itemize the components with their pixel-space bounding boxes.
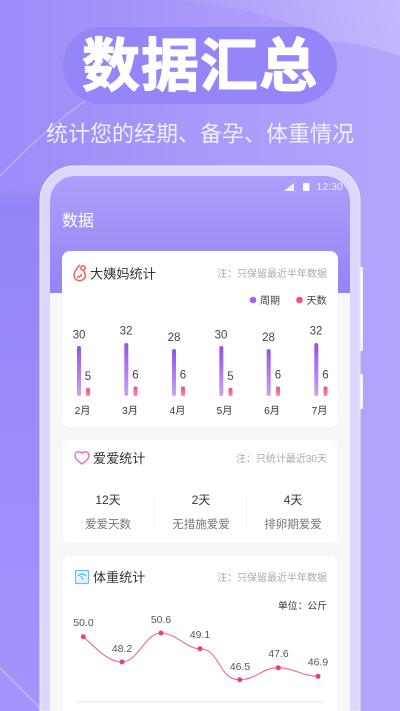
stat: ovulation: 排卵期爱爱 [264, 517, 322, 531]
bar chart: 6月 [264, 405, 280, 417]
subtitle: 统计您的经期、备孕、体重情况 [46, 122, 354, 146]
bar chart: 5 [227, 371, 234, 383]
stat: ovulation [264, 493, 322, 531]
bar chart: 5 [85, 371, 91, 383]
legend [250, 294, 326, 307]
bar chart: 28 [262, 332, 275, 344]
phone screen background [50, 176, 350, 711]
title: 数据汇总 [82, 34, 318, 99]
line chart: 46.5 [230, 662, 250, 673]
stat: days: 爱爱天数 [85, 517, 131, 531]
panel: intimacy stats [62, 440, 338, 543]
status bar [284, 181, 343, 193]
stat: unprotected: 2天 [192, 493, 210, 507]
screen heading: 数据 [62, 212, 94, 230]
line chart: 49.1 [190, 630, 210, 641]
stat: days: 12天 [95, 493, 121, 507]
title pill [63, 27, 337, 104]
bar chart: 5月 [217, 405, 232, 417]
phone frame [40, 166, 360, 711]
phone side buttons [359, 267, 363, 409]
status bar: 12:30 [316, 181, 343, 193]
line chart: 48.2 [112, 644, 132, 655]
line chart: 50.0 [73, 618, 94, 629]
line chart [73, 615, 328, 702]
note: 注：只统计最近30天 [236, 452, 327, 465]
icon: drop [74, 265, 86, 281]
bar chart: 2月 [75, 405, 90, 417]
stat: unprotected: 无措施爱爱 [172, 517, 230, 531]
bar chart: 6 [180, 370, 186, 382]
bar chart: 32 [120, 326, 132, 338]
line chart: 47.6 [268, 649, 289, 660]
stat: unprotected [172, 493, 230, 531]
unit label: 单位：公斤 [278, 599, 327, 612]
bar chart: 30 [73, 330, 85, 342]
stat: days [85, 493, 131, 531]
note: 注：只保留最近半年数据 [217, 571, 327, 584]
panel heading: 爱爱统计 [93, 451, 145, 466]
bar chart: 4月 [170, 405, 185, 417]
bar chart: 6 [275, 370, 281, 382]
bar chart: 7月 [312, 405, 327, 417]
bar chart [73, 326, 329, 417]
stat: ovulation: 4天 [284, 493, 302, 507]
bar chart: 6 [322, 370, 329, 382]
bar chart: 28 [168, 332, 180, 344]
panel: period stats [62, 251, 338, 427]
panel: weight stats [62, 556, 338, 711]
panel heading: 大姨妈统计 [90, 266, 156, 282]
bar chart: 30 [215, 330, 227, 342]
bar chart: 6 [132, 370, 139, 382]
phone screen header [50, 176, 350, 293]
note: 注：只保留最近半年数据 [217, 267, 327, 280]
bar chart: 3月 [122, 405, 138, 417]
icon: heart [75, 452, 89, 464]
legend: 天数 [306, 294, 326, 307]
bar chart: 32 [310, 326, 322, 338]
panel heading: 体重统计 [93, 570, 145, 585]
line chart: 50.6 [151, 615, 171, 626]
line chart: 46.9 [308, 658, 328, 668]
icon: scale [76, 570, 88, 584]
legend: 周期 [260, 295, 280, 307]
